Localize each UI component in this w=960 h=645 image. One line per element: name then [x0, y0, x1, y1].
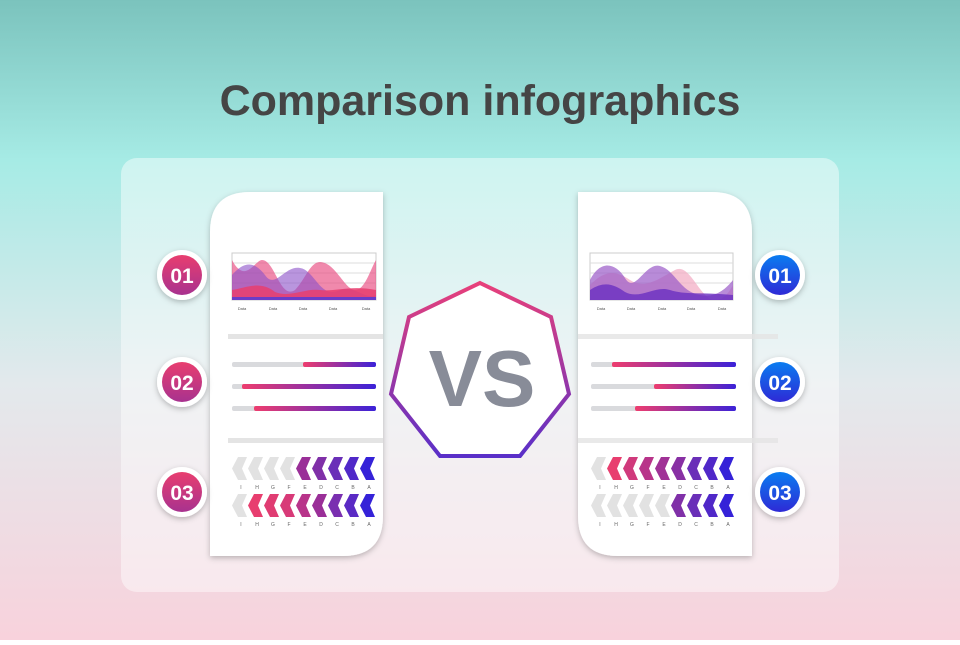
right progress bars [591, 362, 736, 411]
right chevron rows: A [726, 485, 730, 491]
panel: right card [578, 192, 778, 556]
right chevron rows: I [599, 522, 601, 528]
right badges [755, 250, 805, 517]
left chevron rows: A [367, 522, 371, 528]
left chevron rows: B [351, 485, 355, 491]
right area chart: Data [658, 306, 667, 311]
right area chart: Data [718, 306, 727, 311]
left area chart [232, 253, 376, 311]
right chevron rows: E [662, 522, 666, 528]
right badges: 01 [768, 265, 792, 288]
right chevron rows: G [630, 485, 634, 491]
left chevron rows: C [335, 522, 339, 528]
left chevron rows: E [303, 522, 307, 528]
left chevron rows: F [287, 522, 291, 528]
left chevron rows: I [240, 522, 242, 528]
left chevron rows: E [303, 485, 307, 491]
right area chart [590, 253, 733, 311]
right chevron rows: C [694, 522, 698, 528]
right chevron rows: I [599, 485, 601, 491]
right chevron rows: H [614, 522, 618, 528]
title: Comparison infographics [220, 77, 740, 125]
left chevron rows: I [240, 485, 242, 491]
right chevron rows: F [646, 485, 650, 491]
right chevron rows: D [678, 485, 682, 491]
right area chart: Data [597, 306, 606, 311]
left badges [157, 250, 207, 517]
right badges: 02 [768, 372, 792, 395]
right chevron rows: G [630, 522, 634, 528]
right chevron rows: E [662, 485, 666, 491]
right chevron rows: C [694, 485, 698, 491]
right chevron rows [591, 457, 734, 528]
right area chart: Data [627, 306, 636, 311]
left badges: 02 [170, 372, 194, 395]
left area chart: Data [362, 306, 371, 311]
left chevron rows: D [319, 485, 323, 491]
left badges: 01 [170, 265, 194, 288]
left chevron rows: D [319, 522, 323, 528]
right area chart: Data [687, 306, 696, 311]
left chevron rows [232, 457, 375, 528]
right chevron rows: D [678, 522, 682, 528]
left progress bars [232, 362, 376, 411]
panel: left card [210, 192, 383, 556]
VS heptagon [391, 283, 569, 456]
left area chart: Data [269, 306, 278, 311]
left chevron rows: F [287, 485, 291, 491]
left area chart: Data [238, 306, 247, 311]
left chevron rows: C [335, 485, 339, 491]
left chevron rows: G [271, 522, 275, 528]
left chevron rows: G [271, 485, 275, 491]
VS heptagon: VS [429, 334, 535, 423]
left chevron rows: H [255, 485, 259, 491]
left badges: 03 [170, 482, 194, 505]
right chevron rows: B [710, 485, 714, 491]
left chevron rows: B [351, 522, 355, 528]
right chevron rows: A [726, 522, 730, 528]
right chevron rows: F [646, 522, 650, 528]
right chevron rows: H [614, 485, 618, 491]
left chevron rows: H [255, 522, 259, 528]
right chevron rows: B [710, 522, 714, 528]
container panel [121, 158, 839, 592]
left area chart: Data [299, 306, 308, 311]
right badges: 03 [768, 482, 792, 505]
left area chart: Data [329, 306, 338, 311]
left chevron rows: A [367, 485, 371, 491]
